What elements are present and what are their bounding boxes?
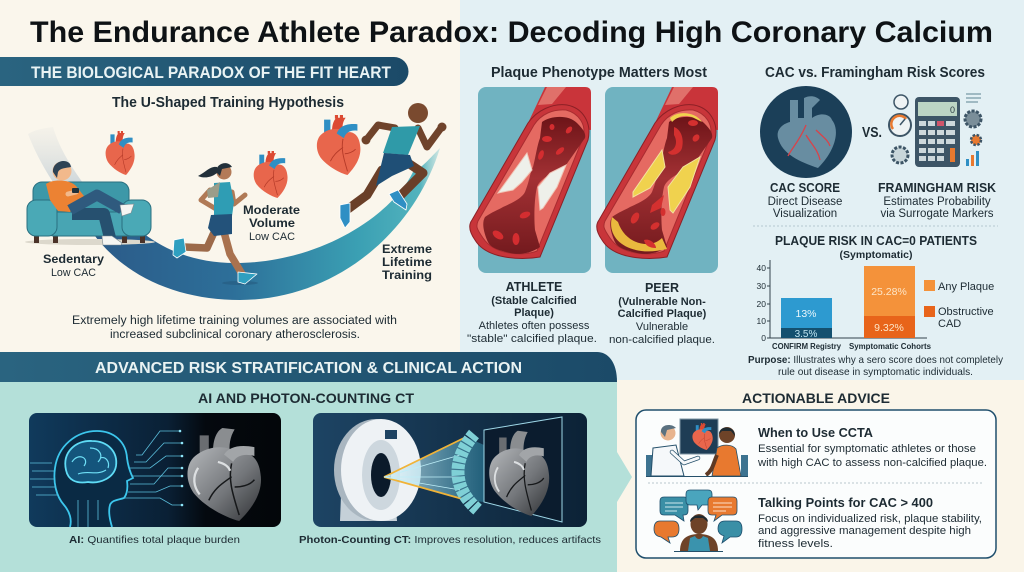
U-shaped curve: [92, 148, 440, 300]
chart heading: [775, 233, 977, 261]
text: CAC score: Direct Disease: [768, 196, 842, 208]
text: CAC score: Visualization: [773, 208, 837, 220]
heading band: [0, 57, 408, 86]
heading: Plaque Phenotype Matters Most: [491, 65, 707, 81]
bar: symptomatic cohorts: 9.32%: [874, 322, 904, 334]
bar chart: CONFIRM Registry: [772, 342, 842, 351]
label: moderate volume: Moderate: [243, 203, 300, 217]
text: talking points: [758, 495, 982, 550]
text: when to use CCTA: [757, 425, 987, 469]
text: Framingham risk: Estimates Probability: [883, 196, 991, 208]
panel: advanced risk stratification: [0, 352, 632, 572]
panel: biological paradox: [0, 57, 446, 341]
text: talking points: fitness levels.: [758, 538, 833, 550]
icon: Framingham calculator: 0: [950, 105, 955, 115]
heading: ACTIONABLE ADVICE: [742, 390, 890, 406]
bar: CONFIRM registry: [781, 298, 832, 340]
icon: speech bubbles and athlete: [654, 490, 742, 552]
label: moderate volume: Low CAC: [249, 231, 295, 243]
label: sedentary: Sedentary: [43, 252, 104, 266]
chart heading: PLAQUE RISK IN CAC=0 PATIENTS: [775, 233, 977, 248]
label: sedentary: [43, 252, 104, 279]
text: athlete: Plaque): [514, 307, 554, 319]
bar: symptomatic cohorts: [864, 266, 915, 338]
image: photon-counting CT scanner: [313, 413, 587, 527]
text block: U-curve takeaway: [72, 315, 397, 341]
bar chart: 30: [757, 281, 766, 291]
text: chart purpose: [748, 354, 1004, 378]
text: talking points: Focus on individualized risk, plaque stability,: [758, 513, 982, 525]
bar chart: 0: [761, 333, 766, 343]
text: Framingham risk: [878, 180, 997, 220]
text: talking points: Talking Points for CAC > 400: [758, 495, 933, 510]
icon: CAC heart scan: [760, 86, 852, 178]
bar chart: 20: [757, 299, 766, 309]
panel: background lower right: [617, 380, 1024, 572]
caption: photon-counting CT: Photon-Counting CT: Improves resolution, reduces artifacts: [299, 534, 601, 546]
text block: U-curve takeaway: Extremely high lifetime training volumes are associated with: [72, 315, 397, 327]
teal background with arrow: [0, 378, 632, 572]
icon: Framingham calculator: [889, 94, 981, 167]
panel: background right top: [460, 0, 1024, 382]
caption: AI: AI: Quantifies total plaque burden: [69, 534, 240, 546]
icon: large heart: [317, 115, 360, 175]
text: athlete: "stable" calcified plaque.: [467, 333, 597, 345]
text: Framingham risk: FRAMINGHAM RISK: [878, 180, 997, 195]
text: peer: PEER: [645, 281, 679, 295]
panel: plaque phenotype: [467, 65, 718, 346]
text: when to use CCTA: with high CAC to assess non-calcified plaque.: [757, 457, 987, 469]
label: extreme lifetime training: Training: [382, 268, 432, 282]
advice card: [636, 410, 996, 558]
text: peer: non-calcified plaque.: [609, 334, 715, 346]
panel: actionable advice: [636, 390, 996, 558]
heading band: THE BIOLOGICAL PARADOX OF THE FIT HEART: [31, 64, 391, 82]
bar: CONFIRM registry: 13%: [795, 308, 817, 320]
bar: symptomatic cohorts: 25.28%: [871, 286, 907, 298]
legend: [924, 280, 994, 330]
label: extreme lifetime training: [382, 242, 432, 282]
bar chart: 40: [757, 263, 766, 273]
label: extreme lifetime training: Lifetime: [382, 255, 432, 269]
label: extreme lifetime training: Extreme: [382, 242, 432, 256]
legend: Any Plaque: [938, 281, 994, 293]
text: CAC score: CAC SCORE: [770, 180, 840, 195]
illustration: athlete artery: [470, 87, 591, 273]
icon: small heart: [106, 131, 135, 175]
subheading: The U-Shaped Training Hypothesis: [112, 95, 344, 111]
icon: extreme runner: [340, 103, 446, 228]
legend: Obstructive: [938, 306, 994, 318]
bar chart: 10: [757, 316, 766, 326]
panel: background left top: [0, 0, 460, 352]
x-ray beam: [384, 437, 484, 502]
text: peer: [609, 281, 715, 346]
text: athlete: Athletes often possess: [479, 320, 590, 332]
image: AI brain and heart: [29, 413, 281, 527]
illustration: peer artery: [597, 87, 718, 273]
detector arc: [458, 434, 478, 510]
heading: CAC vs. Framingham Risk Scores: [765, 65, 985, 81]
heading band: [0, 352, 617, 382]
icon: doctor and patient: [646, 419, 748, 476]
text: chart purpose: Purpose: Illustrates why a sero score does not completely: [748, 354, 1004, 366]
bar: CONFIRM registry: 3.5%: [795, 329, 818, 340]
panel: CAC vs Framingham: [748, 65, 1004, 378]
bar chart: [757, 260, 932, 351]
text: athlete: [467, 280, 597, 345]
text: when to use CCTA: Essential for symptomatic athletes or those: [758, 443, 976, 455]
text: Framingham risk: via Surrogate Markers: [880, 208, 994, 220]
text: peer: Vulnerable: [636, 321, 688, 333]
heading band: ADVANCED RISK STRATIFICATION & CLINICAL ACTION: [95, 360, 522, 377]
pale start of curve: [28, 127, 88, 200]
text: CAC score: [768, 180, 842, 220]
icon: medium heart: [254, 151, 288, 198]
chart heading: (Symptomatic): [840, 249, 912, 261]
text: peer: (Vulnerable Non-: [618, 296, 706, 308]
label: moderate volume: [243, 203, 300, 243]
title: The Endurance Athlete Paradox: Decoding High Coronary Calcium: [30, 16, 993, 49]
label: sedentary: Low CAC: [51, 267, 96, 279]
text: peer: Calcified Plaque): [618, 308, 707, 320]
text: athlete: ATHLETE: [506, 280, 562, 294]
bar chart: Symptomatic Cohorts: [849, 342, 932, 351]
display screen: [484, 417, 562, 522]
legend: CAD: [938, 318, 961, 330]
label: moderate volume: Volume: [249, 216, 295, 230]
scanner stand: [340, 495, 397, 521]
text: chart purpose: rule out disease in symptomatic individuals.: [778, 366, 973, 378]
icon: moderate runner: [173, 163, 258, 285]
text: when to use CCTA: When to Use CCTA: [758, 425, 874, 440]
text: athlete: (Stable Calcified: [491, 295, 577, 307]
label: vs: VS.: [862, 124, 882, 141]
subheading: AI AND PHOTON-COUNTING CT: [198, 390, 414, 406]
text block: U-curve takeaway: increased subclinical coronary atherosclerosis.: [110, 329, 360, 341]
icon: sedentary person on couch: [25, 161, 155, 245]
text: talking points: and aggressive management despite high: [758, 525, 971, 537]
